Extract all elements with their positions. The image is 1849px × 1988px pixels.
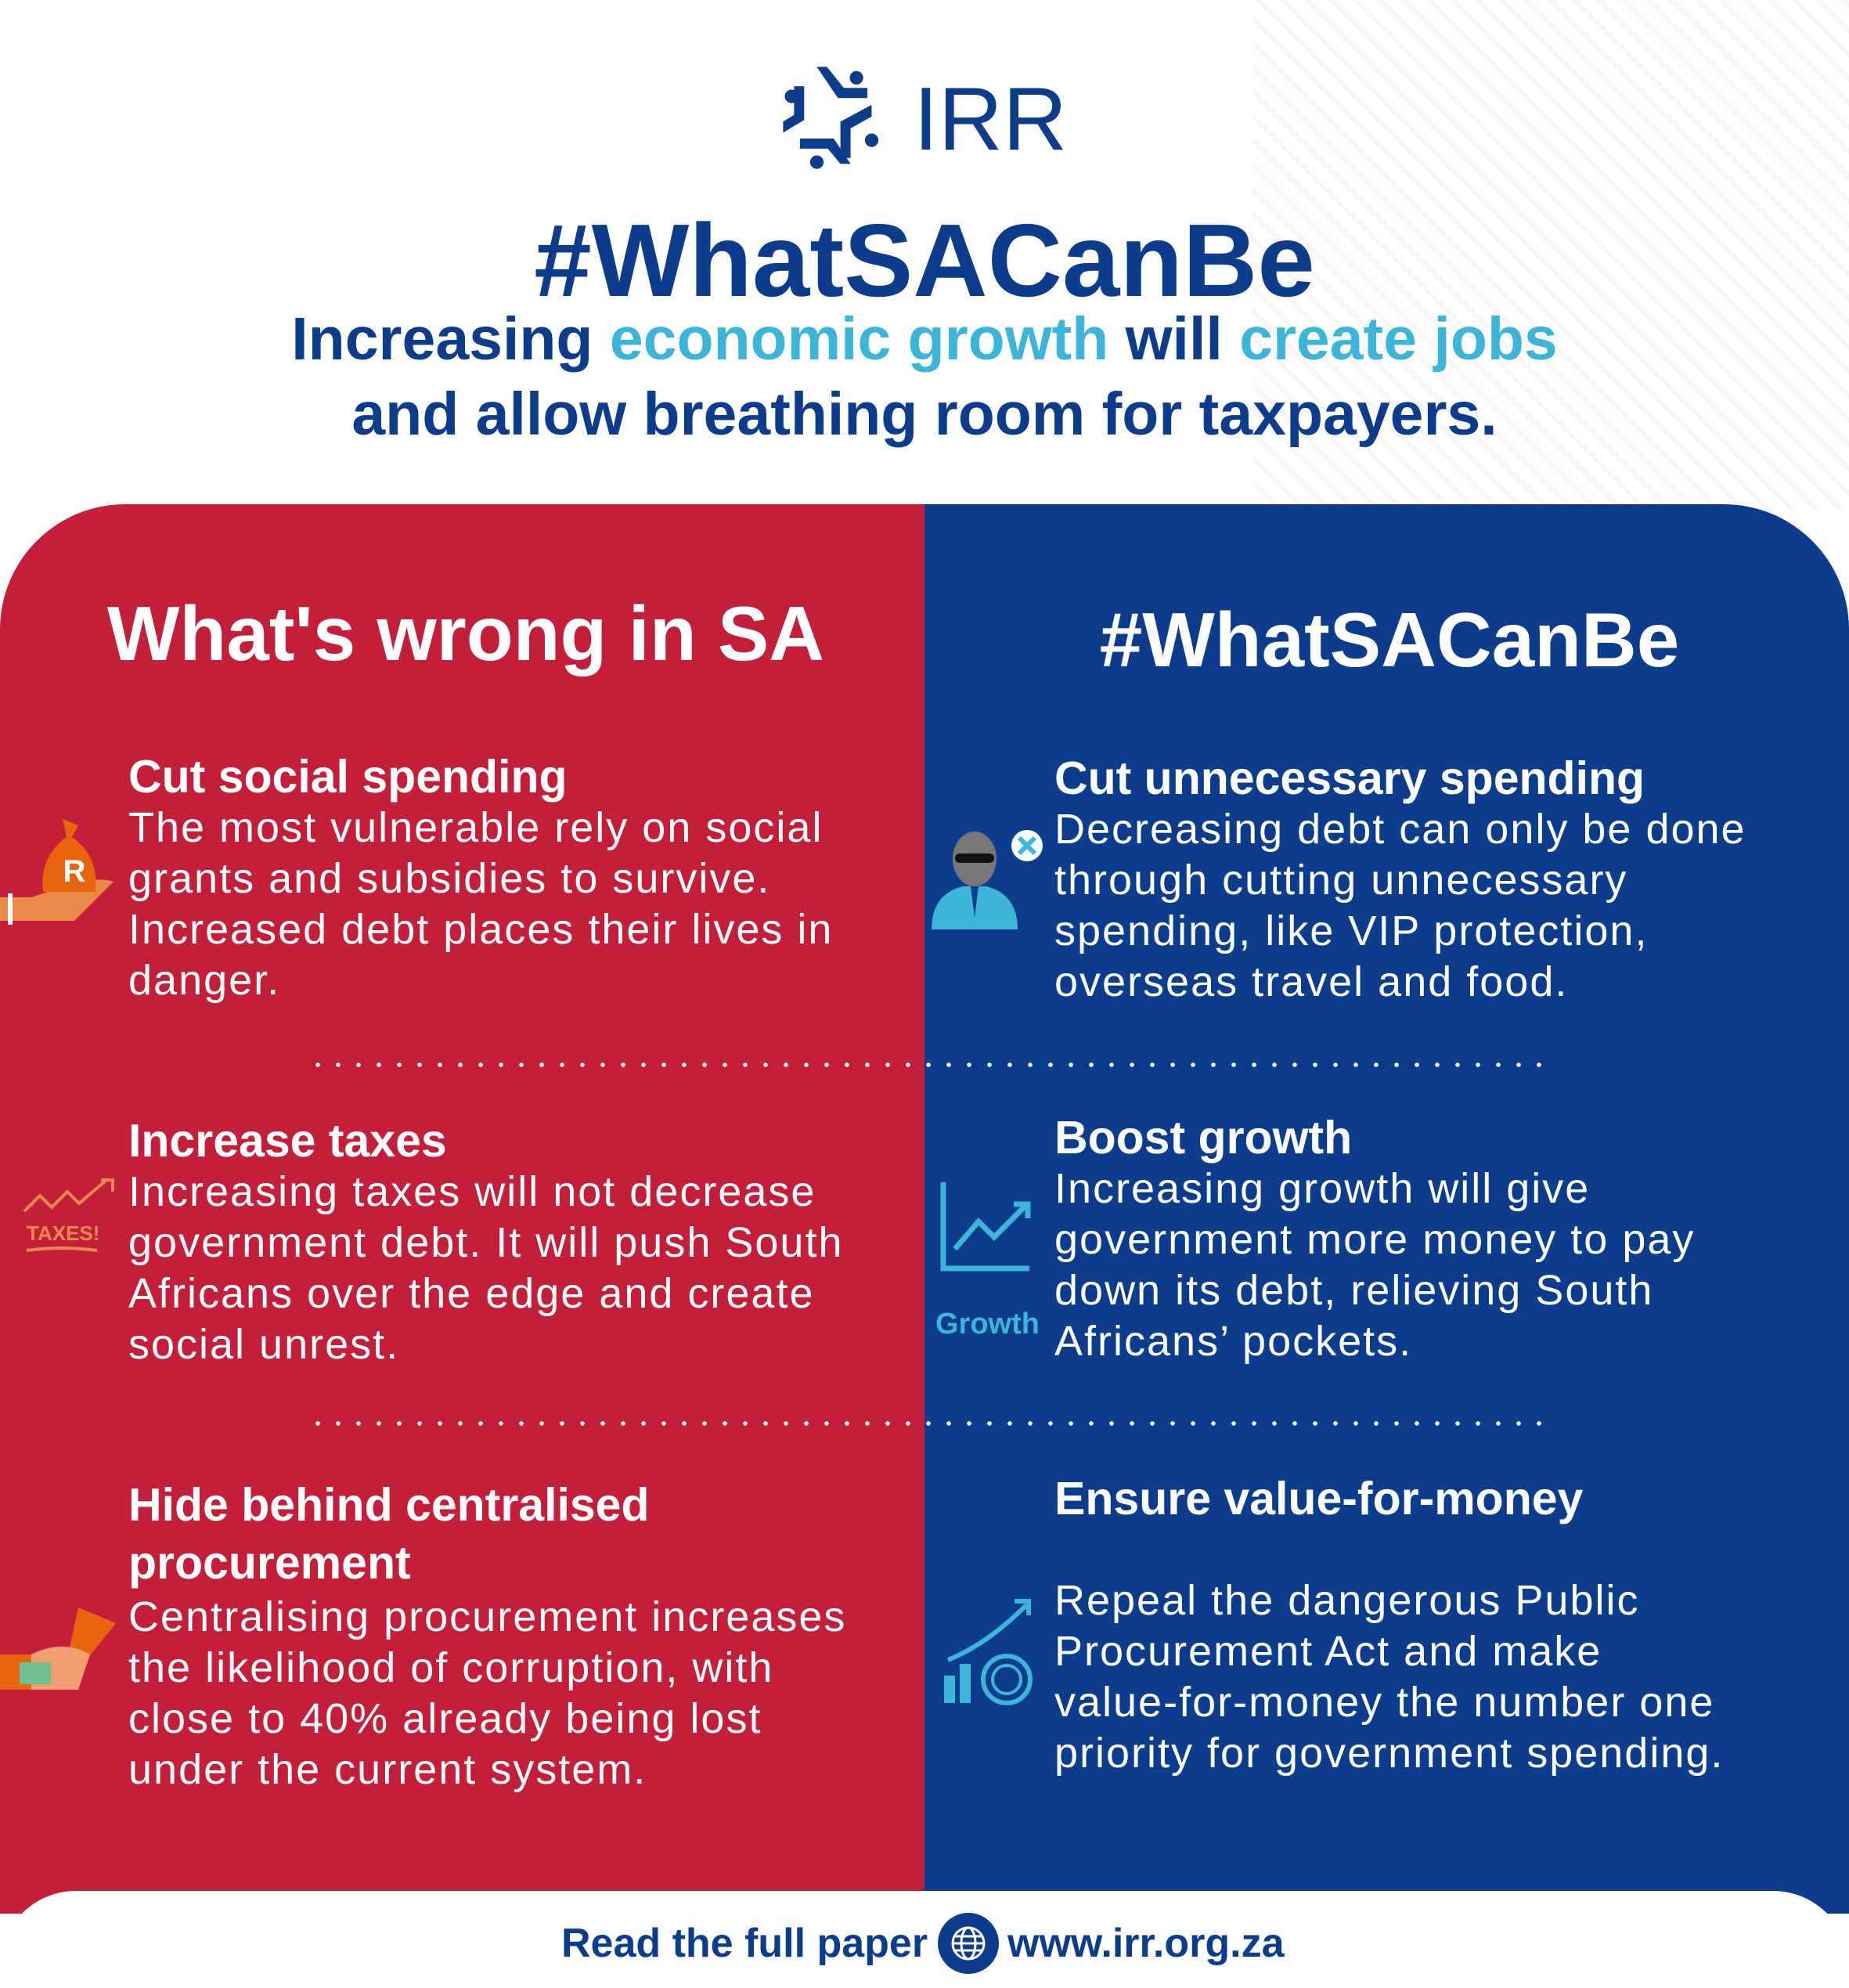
footer [0,1891,1849,1988]
icon: growth chart [935,1182,1040,1340]
footer url: www.irr.org.za [1007,1921,1284,1966]
panel: what SA can be (blue) [924,504,1849,1914]
icon: value chart with coin [944,1599,1033,1705]
item: centralised procurement: Centralising procurement increases [128,1593,846,1640]
icon: taxes chart [23,1178,114,1252]
item: cut social spending: danger. [128,957,280,1004]
item: centralised procurement: procurement [128,1537,411,1589]
divider dots 2 [308,1421,1546,1426]
icon: handshake with money [0,1607,116,1690]
item: cut unnecessary spending: Cut unnecessary spending [1054,752,1645,804]
title: #WhatSACanBe [534,203,1315,318]
item: centralised procurement: close to 40% already being lost [128,1695,762,1742]
item: boost growth [1054,1112,1695,1365]
item: cut social spending: grants and subsidies to survive. [128,855,770,902]
item: increase taxes: government debt. It will push South [128,1219,844,1266]
item: cut social spending: Cut social spending [128,751,568,803]
item: boost growth: Africans’ pockets. [1054,1318,1412,1365]
logo: IRR [914,70,1067,169]
item: increase taxes: social unrest. [128,1321,399,1368]
item: value for money: value-for-money the number one [1054,1679,1714,1726]
icon: taxes chart: TAXES! [27,1221,99,1245]
divider dots 1 [308,1063,1546,1067]
item: value for money: Procurement Act and make [1054,1628,1602,1675]
item: increase taxes [128,1115,844,1368]
item: value for money [1054,1473,1724,1777]
panel: what's wrong (red) [0,504,924,1914]
background pattern top-right [1252,0,1849,509]
left header: What's wrong in SA [107,590,824,676]
item: value for money: Ensure value-for-money [1054,1473,1583,1524]
icon: hand with money bag [0,819,114,925]
icon: VIP bodyguard [932,830,1043,929]
item: cut unnecessary spending: spending, like VIP protection, [1054,907,1648,954]
subtitle [291,305,1558,448]
item: cut unnecessary spending [1054,752,1746,1005]
item: increase taxes: Increase taxes [128,1115,447,1167]
icon: globe [938,1913,999,1974]
item: boost growth: government more money to pay [1054,1216,1695,1263]
item: cut social spending: The most vulnerable rely on social [128,804,823,851]
item: centralised procurement: the likelihood of corruption, with [128,1644,773,1691]
item: value for money: Repeal the dangerous Public [1054,1577,1639,1624]
item: boost growth: Boost growth [1054,1112,1352,1164]
item: boost growth: Increasing growth will give [1054,1165,1590,1212]
item: increase taxes: Africans over the edge and create [128,1270,815,1317]
footer text: Read the full paper [561,1921,928,1966]
item: boost growth: down its debt, relieving South [1054,1267,1653,1314]
icon: growth chart: Growth [935,1308,1040,1340]
item: centralised procurement: Hide behind centralised [128,1479,650,1531]
item: increase taxes: Increasing taxes will not decrease [128,1168,816,1215]
item: cut social spending [128,751,833,1004]
item: cut unnecessary spending: through cutting unnecessary [1054,857,1627,904]
icon: hand with money bag: R [63,854,86,889]
item: centralised procurement: under the current system. [128,1746,647,1793]
subtitle: and allow breathing room for taxpayers. [351,381,1498,448]
item: cut unnecessary spending: overseas travel and food. [1054,958,1568,1005]
logo [783,67,1067,169]
item: centralised procurement [128,1479,846,1793]
right header: #WhatSACanBe [1100,597,1679,683]
item: cut social spending: Increased debt places their lives in [128,906,833,953]
subtitle: Increasing economic growth will create jobs [291,305,1558,373]
item: cut unnecessary spending: Decreasing debt can only be done [1054,806,1746,853]
item: value for money: priority for government spending. [1054,1730,1724,1777]
